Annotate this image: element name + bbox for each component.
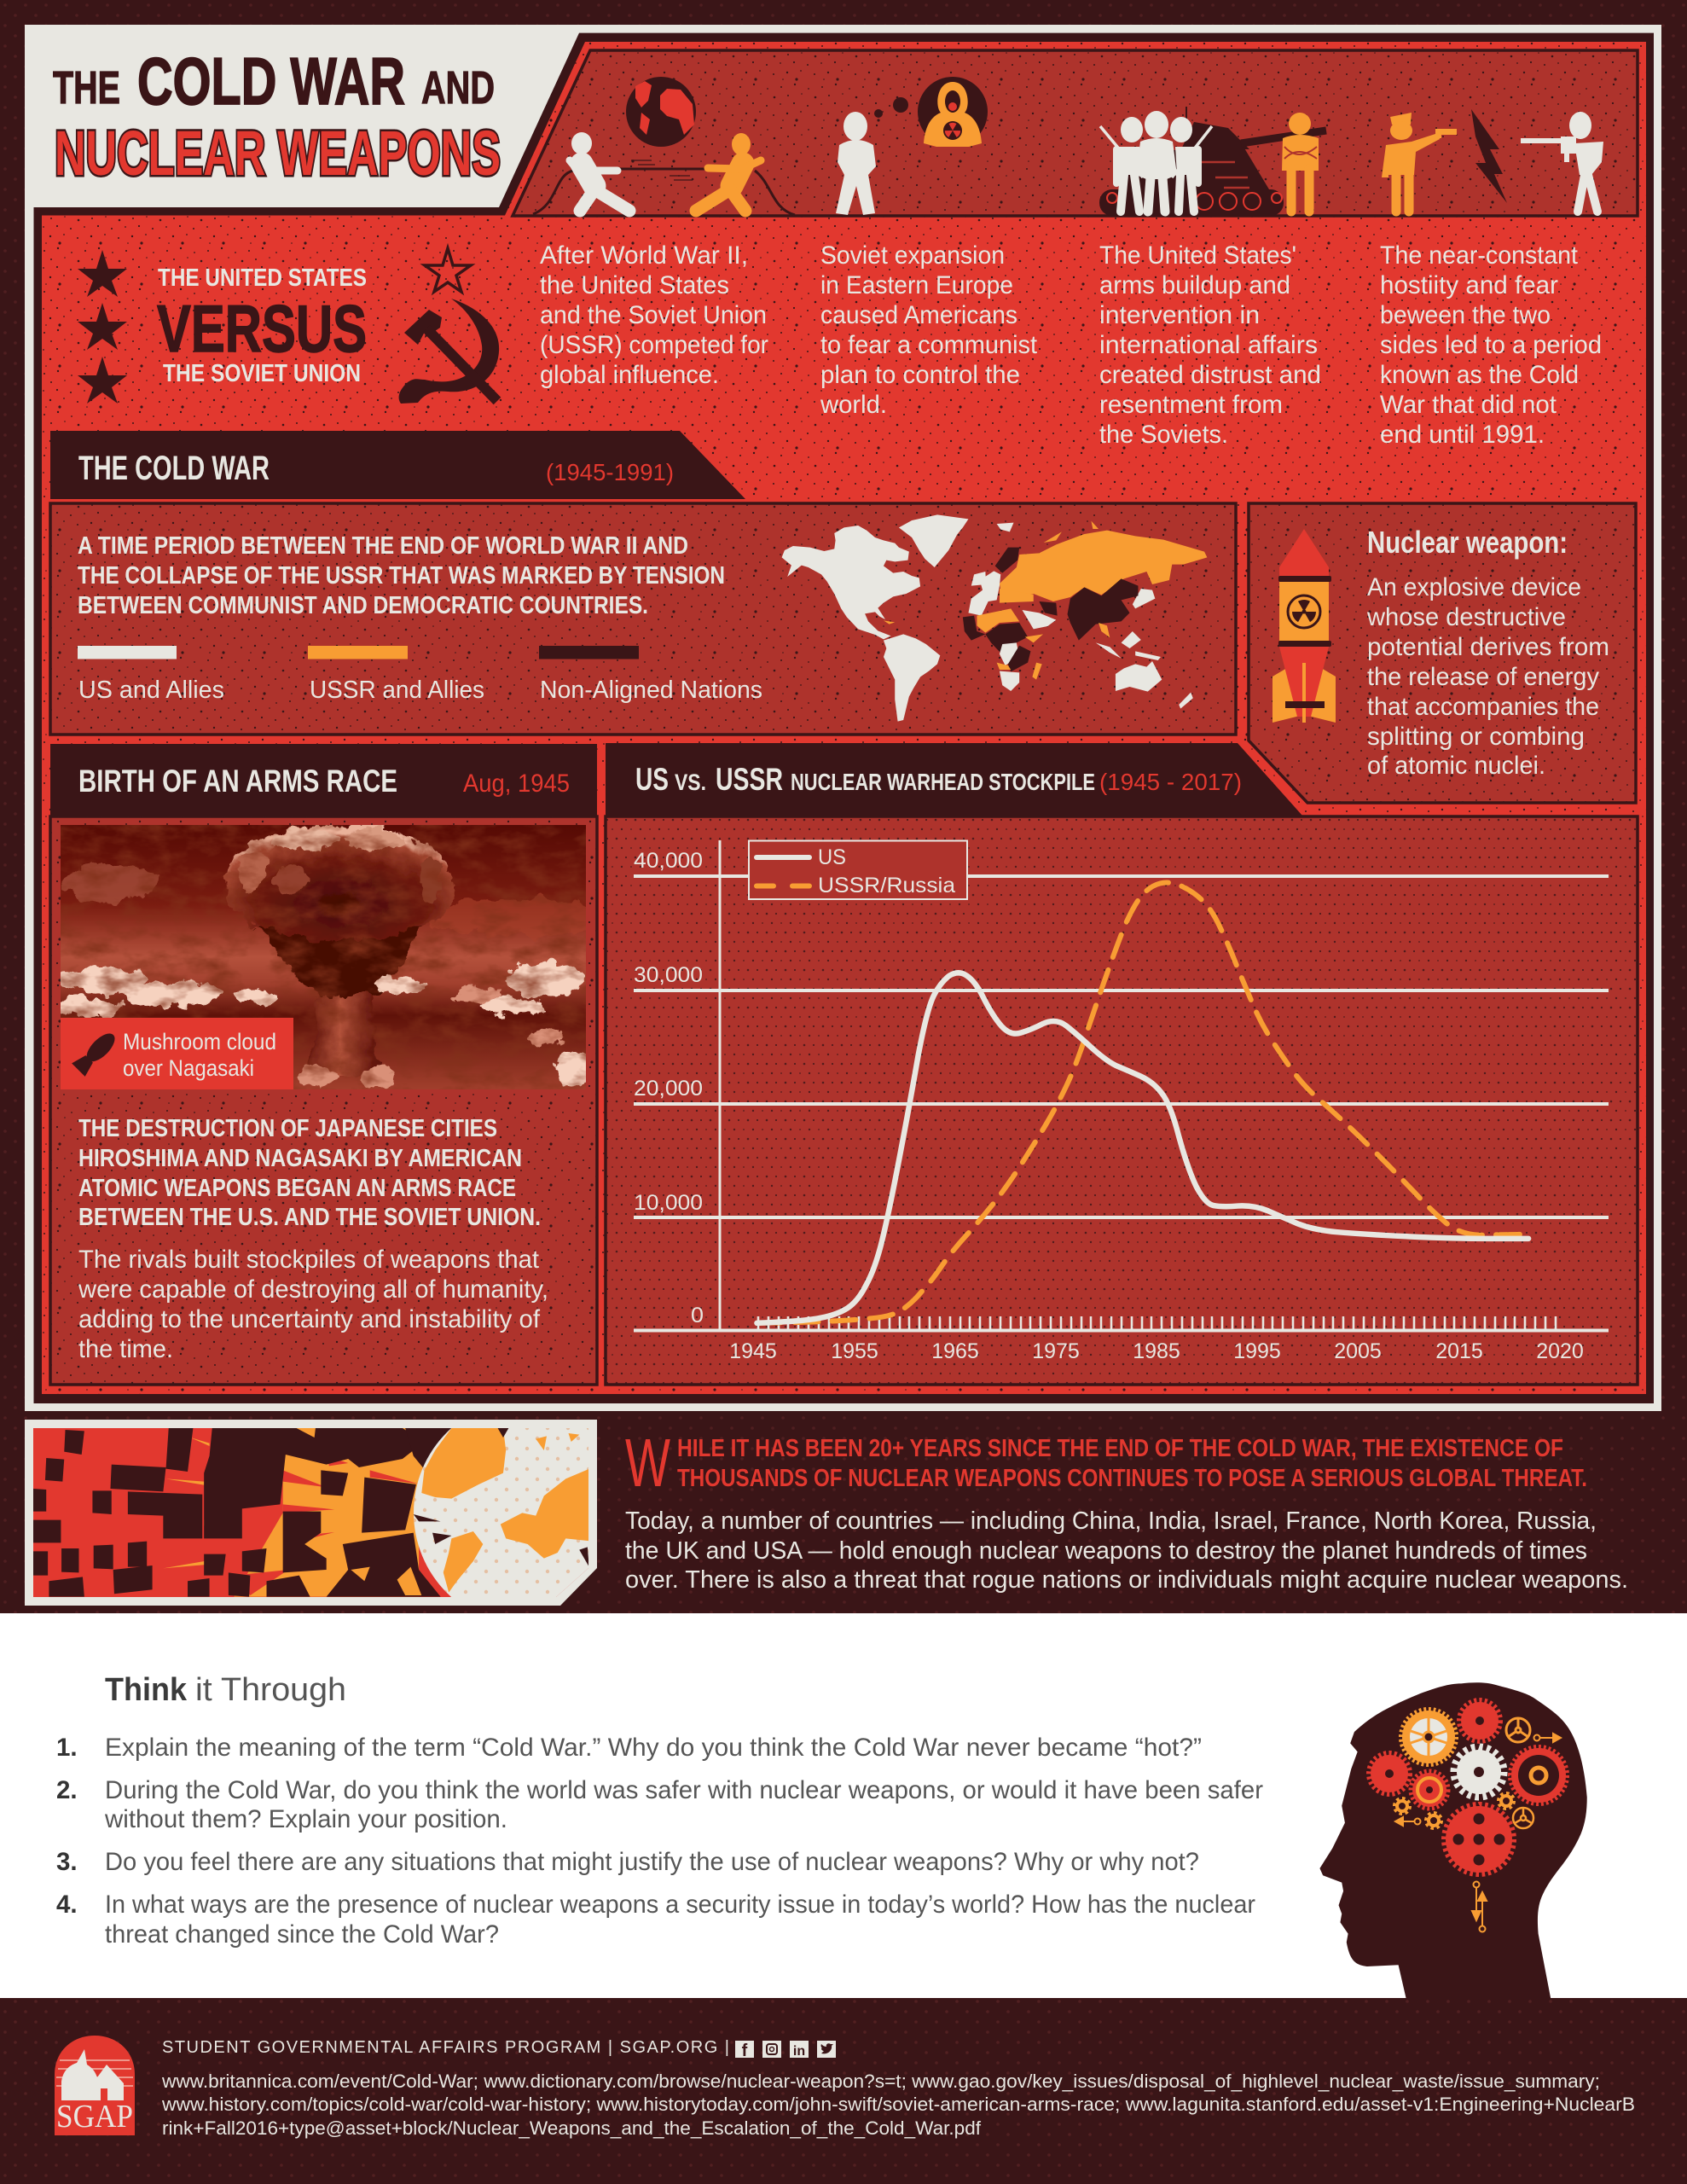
text block: hiroshima and nagasaki: BETWEEN THE U.S. AND THE SOVIET UNION. (78, 1204, 541, 1231)
chart: legend: US (818, 845, 846, 869)
text block: questions: In what ways are the presence of nuclear weapons a security issue in today’s world? How has the nuclear (105, 1891, 1255, 1919)
panel: cold war definition (50, 503, 1236, 735)
text block: nuclear weapon body: that accompanies the (1367, 693, 1599, 721)
panel: top illustration strip (513, 50, 1638, 216)
title (53, 44, 501, 189)
text block: nuclear weapon body (1366, 573, 1609, 780)
heading: think it through: Think (105, 1672, 188, 1708)
chart: US line (757, 973, 1528, 1323)
column 4: The near-constant (1380, 241, 1579, 270)
chart: axis labels: 1995 (1233, 1339, 1281, 1363)
chart: grid and axes (634, 840, 1609, 1331)
text block: sources (161, 2071, 1635, 2139)
text block: nuclear weapon body: whose destructive (1366, 603, 1566, 631)
column 3: the Soviets. (1099, 421, 1228, 449)
chart: axis labels: 1975 (1032, 1339, 1080, 1363)
chart: axis labels: 1985 (1133, 1339, 1180, 1363)
column 2: in Eastern Europe (820, 271, 1013, 299)
column 4: sides led to a period (1380, 331, 1602, 359)
heading: think it through: it Through (195, 1672, 346, 1708)
column 2: to fear a communist (820, 331, 1038, 359)
text block: definition (78, 532, 725, 619)
text block: definition: A TIME PERIOD BETWEEN THE END OF WORLD WAR II AND (78, 532, 688, 560)
panel: footer: STUDENT GOVERNMENTAL AFFAIRS PROGRAM | SGAP.ORG | (162, 2038, 729, 2057)
heading: birth of an arms race (50, 744, 597, 816)
column 2: plan to control the (820, 361, 1020, 389)
text block: definition: BETWEEN COMMUNIST AND DEMOCRATIC COUNTRIES. (78, 592, 648, 619)
text block: questions: Explain the meaning of the term “Cold War.” Why do you think the Cold War never became “hot?” (105, 1734, 1202, 1762)
callout: photo caption: over Nagasaki (123, 1055, 254, 1081)
column 3: intervention in (1099, 301, 1260, 329)
text block: questions: threat changed since the Cold War? (105, 1920, 499, 1949)
panel: nuclear weapon definition: Nuclear weapon: (1367, 525, 1568, 560)
column 1: (USSR) competed for (540, 331, 768, 359)
cream frame (25, 25, 1661, 1411)
icon: rocket (1272, 529, 1336, 723)
column 3: arms buildup and (1099, 271, 1290, 299)
column 4 (1380, 241, 1602, 449)
text block: hiroshima and nagasaki: HIROSHIMA AND NAGASAKI BY AMERICAN (78, 1145, 522, 1172)
chart: axis labels: 1945 (729, 1339, 777, 1363)
text block: rival stockpiles: The rivals built stockpiles of weapons that (78, 1246, 540, 1274)
text block: rival stockpiles: were capable of destroying all of humanity, (78, 1275, 548, 1304)
column 2: caused Americans (820, 301, 1017, 329)
text block: rival stockpiles: adding to the uncertainty and instability of (78, 1305, 541, 1333)
column 1: the United States (540, 271, 729, 299)
text block: questions: without them? Explain your position. (104, 1805, 507, 1833)
column 1: and the Soviet Union (540, 301, 767, 329)
column 1: After World War II, (540, 241, 748, 270)
text block: continuing threat: Today, a number of countries — including China, India, Israel, France, North Korea, Russia, (625, 1507, 1597, 1535)
chart: legend: USSR/Russia (818, 874, 955, 897)
text block: intro columns (540, 241, 1602, 449)
heading: warhead stockpile: (1945 - 2017) (1099, 769, 1242, 795)
page background (0, 0, 1687, 1613)
panel: warhead stockpile chart (606, 743, 1638, 1385)
photo: mushroom cloud (59, 825, 614, 1089)
icon: three stars (78, 250, 127, 404)
callout: photo caption (61, 1018, 293, 1089)
heading: warhead stockpile: US (635, 762, 669, 797)
text block: nuclear weapon body: splitting or combing (1367, 723, 1585, 751)
column 3: resentment from (1099, 391, 1283, 419)
icon: tug of war over the globe (533, 77, 795, 215)
heading: the cold war: (1945-1991) (546, 459, 674, 485)
heading: the cold war (50, 431, 745, 499)
text block: questions: 2. (56, 1776, 78, 1804)
column 3: The United States' (1099, 241, 1296, 270)
callout: photo caption: Mushroom cloud (123, 1029, 276, 1054)
column 4: beween the two (1380, 301, 1551, 329)
column 2: Soviet expansion (820, 241, 1005, 270)
text block: nuclear weapon body: the release of energy (1367, 663, 1599, 691)
column 3 (1099, 241, 1321, 449)
text block: continuing threat: the UK and USA — hold enough nuclear weapons to destroy the planet hundreds of times (625, 1537, 1587, 1565)
text block: definition: THE COLLAPSE OF THE USSR THAT WAS MARKED BY TENSION (78, 562, 725, 590)
column 3: created distrust and (1099, 361, 1321, 389)
text block: rival stockpiles: the time. (78, 1335, 173, 1363)
text block: continuing threat (625, 1425, 1628, 1594)
text block: questions: During the Cold War, do you think the world was safer with nuclear weapons, or would it have been safer (105, 1776, 1263, 1804)
map: cold war alliances (782, 514, 1207, 722)
text block: questions: 3. (56, 1848, 78, 1876)
heading: birth of an arms race: BIRTH OF AN ARMS RACE (78, 764, 397, 799)
heading: birth of an arms race: Aug, 1945 (463, 770, 570, 798)
chart: axis labels: 1965 (931, 1339, 979, 1363)
chart: axis labels: 1955 (831, 1339, 878, 1363)
chart: axis labels (634, 849, 1584, 1363)
title: AND (421, 62, 495, 113)
legend: Non-Aligned Nations (540, 677, 762, 704)
icons: social media: in (793, 2044, 805, 2059)
logo: SGAP: SGAP (56, 2099, 133, 2135)
text block: sources: www.britannica.com/event/Cold-War; www.dictionary.com/browse/nuclear-weapon?s=t; www.gao.gov/key_issues/disposal_of_highlevel_nuclear_waste/issue_summary; (161, 2071, 1600, 2092)
panel: think it through (0, 1613, 1687, 1998)
heading: the cold war: THE COLD WAR (78, 450, 270, 487)
text block: questions: Do you feel there are any situations that might justify the use of nuclear weapons? Why or why not? (105, 1848, 1199, 1876)
arrows inside head (1395, 1734, 1561, 1931)
chart: axis labels: 2015 (1435, 1339, 1483, 1363)
chart: USSR/Russia line (757, 883, 1528, 1323)
title: NUCLEAR WEAPONS (55, 118, 501, 189)
logo: SGAP (55, 2036, 135, 2135)
title: COLD WAR (137, 44, 405, 119)
legend: US and Allies (78, 677, 224, 704)
column 1: global influence. (540, 361, 719, 389)
panel: versus emblem: THE UNITED STATES (158, 264, 367, 292)
illustration: globe under explosion (25, 1420, 597, 1606)
heading: warhead stockpile: USSR (716, 762, 783, 797)
panel: versus emblem (78, 248, 499, 404)
text block: questions: 1. (56, 1734, 78, 1762)
legend (78, 646, 762, 704)
text block: continuing threat: over. There is also a threat that rogue nations or individuals might acquire nuclear weapons. (625, 1566, 1628, 1594)
text block: continuing threat: W (625, 1425, 670, 1501)
icon: tank and soldiers (1099, 107, 1326, 216)
text block: nuclear weapon body: potential derives from (1367, 633, 1609, 661)
panel: nuclear weapon definition (1249, 503, 1636, 803)
heading: warhead stockpile: NUCLEAR WARHEAD STOCKPILE (791, 769, 1095, 795)
column 2 (820, 241, 1038, 419)
column 4: War that did not (1380, 391, 1557, 419)
chart: axis labels: 2005 (1334, 1339, 1382, 1363)
icons: social media: f (742, 2042, 748, 2060)
heading: think it through (105, 1672, 346, 1708)
icon: hammer and sickle with star (399, 248, 499, 404)
text block: hiroshima and nagasaki (78, 1115, 541, 1231)
text block: sources: rink+Fall2016+type@asset+block/Nuclear_Weapons_and_the_Escalation_of_the_Cold_War.pdf (162, 2117, 982, 2139)
chart: axis labels: 30,000 (634, 963, 703, 987)
panel: footer (0, 1998, 1687, 2184)
column 3: international affairs (1099, 331, 1318, 359)
text block: questions: 4. (56, 1891, 78, 1919)
text block: hiroshima and nagasaki: ATOMIC WEAPONS BEGAN AN ARMS RACE (78, 1175, 516, 1202)
icon: bomb (72, 1028, 120, 1077)
icon: head with gears (1319, 1682, 1587, 1999)
icons: social media (735, 2041, 836, 2060)
column 4: end until 1991. (1380, 421, 1545, 449)
chart: axis labels: 40,000 (634, 849, 703, 873)
panel: versus emblem: THE SOVIET UNION (163, 360, 361, 387)
text block: hiroshima and nagasaki: THE DESTRUCTION OF JAPANESE CITIES (78, 1115, 497, 1142)
chart: axis labels: 2020 (1536, 1339, 1584, 1363)
icon: frightened figure with thought bubble (836, 77, 988, 215)
gear cluster (1369, 1700, 1567, 1874)
title: THE (53, 62, 120, 113)
chart: axis labels: 0 (691, 1304, 704, 1327)
text block: sources: www.history.com/topics/cold-war/cold-war-history; www.historytoday.com/john-swift/soviet-american-arms-race; www.lagunita.stanford.edu/asset-v1:Engineering+NuclearB (161, 2094, 1635, 2115)
text block: questions (56, 1734, 1263, 1949)
text block: rival stockpiles (78, 1246, 548, 1363)
chart: axis labels: 20,000 (634, 1077, 703, 1101)
text block: nuclear weapon body: An explosive device (1367, 573, 1581, 601)
legend: USSR and Allies (310, 677, 484, 704)
column 2: world. (820, 391, 887, 419)
column 1 (540, 241, 768, 389)
text block: nuclear weapon body: of atomic nuclei. (1367, 752, 1545, 780)
chart: legend (749, 841, 967, 899)
panel: birth of an arms race (50, 744, 614, 1385)
column 4: known as the Cold (1380, 361, 1579, 389)
column 4: hostiity and fear (1380, 271, 1558, 299)
panel: versus emblem: VERSUS (157, 291, 367, 366)
heading: warhead stockpile: VS. (675, 770, 706, 795)
chart: axis labels: 10,000 (634, 1191, 703, 1215)
heading: warhead stockpile (606, 743, 1302, 816)
icon: standoff between armed figures (1382, 109, 1603, 212)
